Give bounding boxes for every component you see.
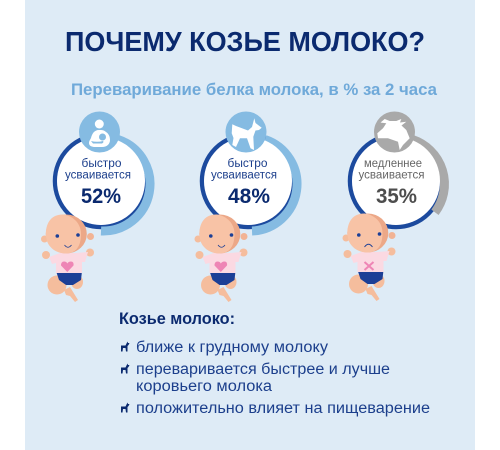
bullet 2: переваривается быстрее и лучше: [136, 361, 390, 378]
light arc: [252, 140, 297, 231]
icon: goat: [226, 112, 266, 152]
value: 35%: [376, 185, 417, 208]
label: медленнее: [364, 158, 422, 170]
panel: cow milk gauge: [350, 112, 444, 227]
bullet 1: ближе к грудному молоку: [136, 339, 328, 356]
icon: mother and child: [79, 112, 120, 152]
label: быстро: [82, 158, 122, 170]
benefits list: [119, 310, 430, 417]
label: быстро: [228, 158, 268, 170]
panel: goat milk gauge: [202, 112, 297, 231]
icon: cow: [374, 112, 415, 152]
grey arc: [412, 140, 444, 212]
title: ПОЧЕМУ КОЗЬЕ МОЛОКО?: [65, 26, 425, 57]
value: 52%: [81, 185, 121, 208]
bullet 2: коровьего молока: [136, 378, 272, 395]
panel: goat milk gauge: усваивается: [211, 170, 277, 182]
list heading: Козье молоко:: [119, 310, 235, 328]
baby: happy, goat milk: [194, 214, 248, 302]
value: 48%: [228, 185, 270, 208]
panel: breast milk gauge: [55, 112, 150, 231]
subtitle: Переваривание белка молока, в % за 2 часа: [71, 81, 438, 99]
baby: sad, cow milk: [342, 214, 396, 301]
light arc: [101, 140, 150, 231]
panel: cow milk gauge: усваивается: [358, 170, 424, 182]
bullet 2: [121, 361, 390, 395]
bullet 3: положительно влияет на пищеварение: [136, 400, 430, 417]
baby: happy, breast milk: [41, 214, 94, 302]
panel: breast milk gauge: усваивается: [65, 170, 131, 182]
